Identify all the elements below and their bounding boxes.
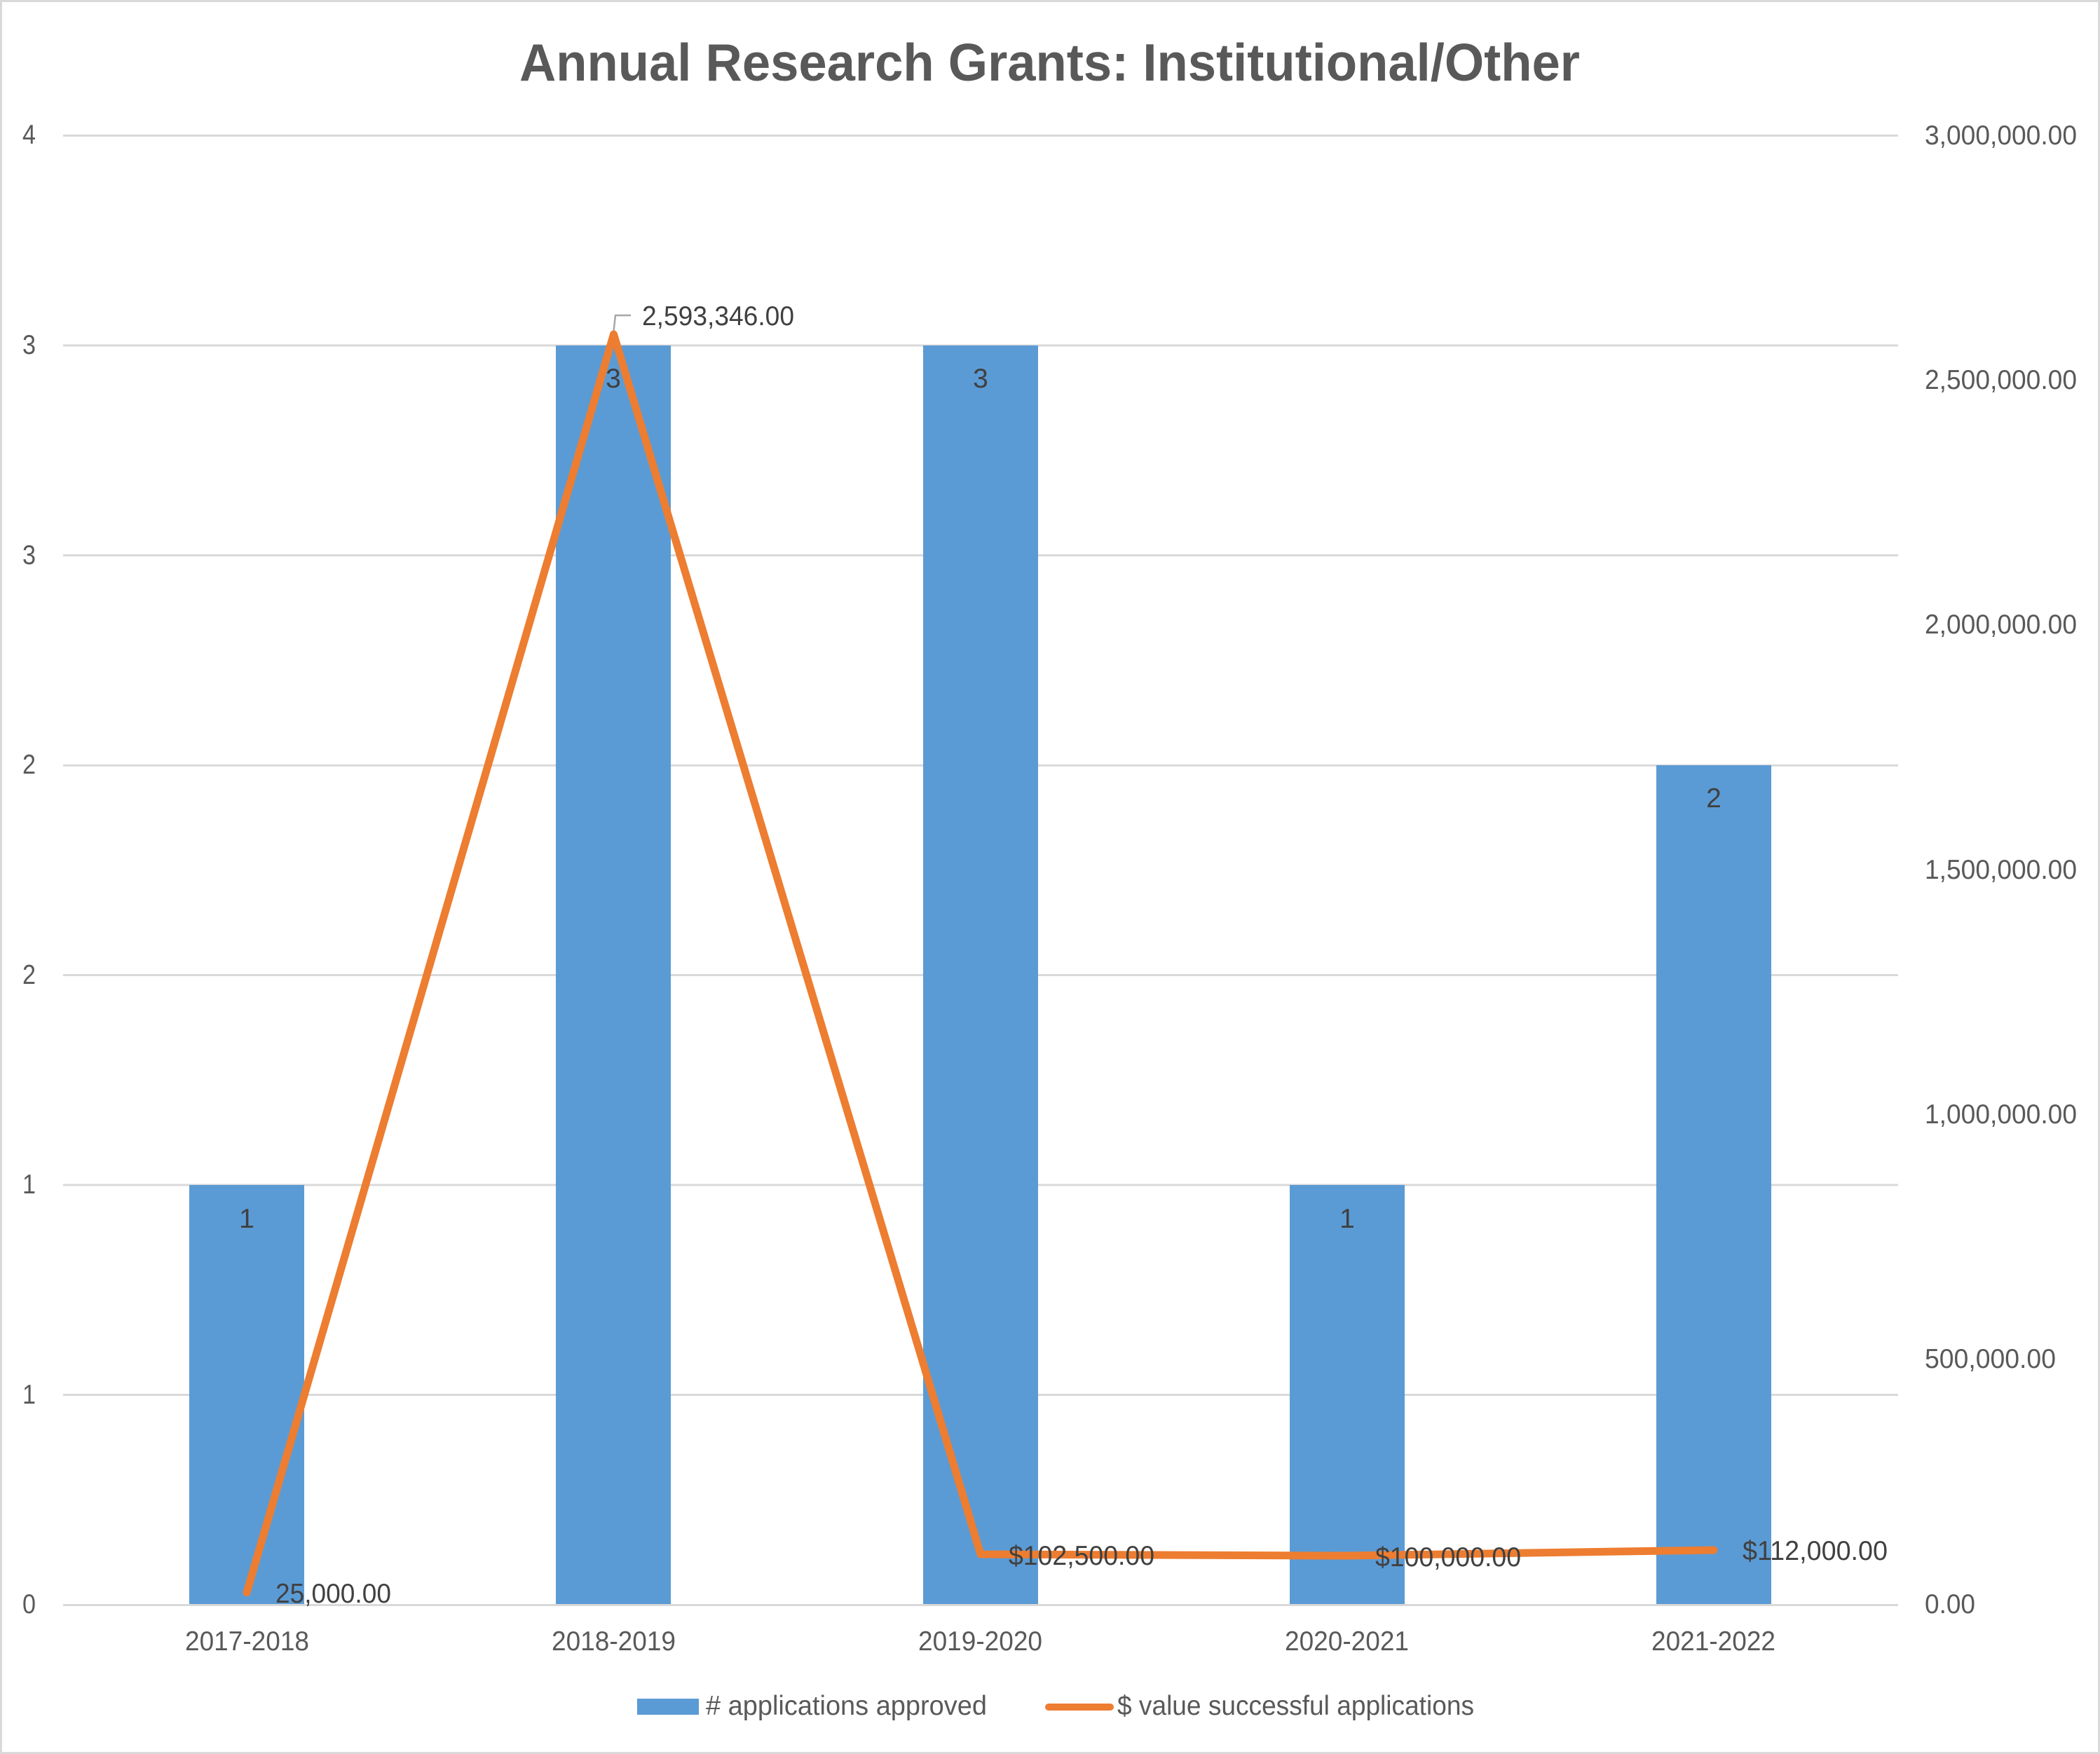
left axis: number of applications: 4 — [22, 120, 36, 150]
left axis: number of applications: 3 — [22, 330, 36, 360]
legend swatch: line — [1049, 1704, 1110, 1711]
category axis labels — [185, 1626, 1775, 1657]
right axis: dollar value: 2,000,000.00 — [1925, 610, 2077, 640]
left axis: number of applications: 1 — [22, 1380, 36, 1410]
left axis: number of applications: 0 — [22, 1589, 36, 1619]
category axis labels: 2019-2020 — [918, 1626, 1042, 1657]
bar chart: applications approved — [189, 345, 1771, 1604]
line value labels: $112,000.00 — [1743, 1536, 1888, 1566]
legend text: applications approved: # applications approved — [706, 1691, 987, 1721]
left axis: number of applications: 3 — [22, 540, 36, 570]
line value labels: 25,000.00 — [275, 1579, 391, 1609]
category axis labels: 2018-2019 — [552, 1626, 676, 1657]
right axis: dollar value: 2,500,000.00 — [1925, 365, 2077, 395]
category axis labels: 2020-2021 — [1285, 1626, 1409, 1657]
line value labels: 2,593,346.00 — [642, 301, 794, 331]
left axis: number of applications: 2 — [22, 960, 36, 990]
legend text: dollar value: $ value successful applications — [1117, 1691, 1474, 1721]
bar value labels: 1 — [239, 1204, 254, 1234]
right axis: dollar value — [1925, 121, 2077, 1619]
category axis labels: 2021-2022 — [1651, 1626, 1775, 1657]
bar value labels: 1 — [1339, 1204, 1355, 1234]
right axis: dollar value: 0.00 — [1925, 1589, 1975, 1619]
line value labels: $102,500.00 — [1009, 1541, 1154, 1571]
title: Annual Research Grants: Institutional/Other — [519, 33, 1580, 92]
leader line for peak label — [614, 315, 631, 331]
right axis: dollar value: 1,000,000.00 — [1925, 1099, 2077, 1130]
left axis: number of applications: 2 — [22, 750, 36, 780]
left axis: number of applications: 1 — [22, 1170, 36, 1200]
bar value labels: 3 — [606, 364, 621, 394]
category axis labels: 2017-2018 — [185, 1626, 309, 1657]
bar value labels — [239, 364, 1721, 1234]
bar value labels: 3 — [973, 364, 988, 394]
line series: dollar value of successful applications — [247, 334, 1714, 1592]
line value labels — [275, 301, 1888, 1609]
right axis: dollar value: 500,000.00 — [1925, 1344, 2056, 1374]
legend swatch: bars — [637, 1699, 699, 1715]
left axis: number of applications — [22, 120, 36, 1619]
right axis: dollar value: 3,000,000.00 — [1925, 121, 2077, 151]
legend — [637, 1691, 1474, 1721]
bar value labels: 2 — [1706, 783, 1721, 814]
line value labels: $100,000.00 — [1375, 1542, 1521, 1573]
right axis: dollar value: 1,500,000.00 — [1925, 855, 2077, 885]
